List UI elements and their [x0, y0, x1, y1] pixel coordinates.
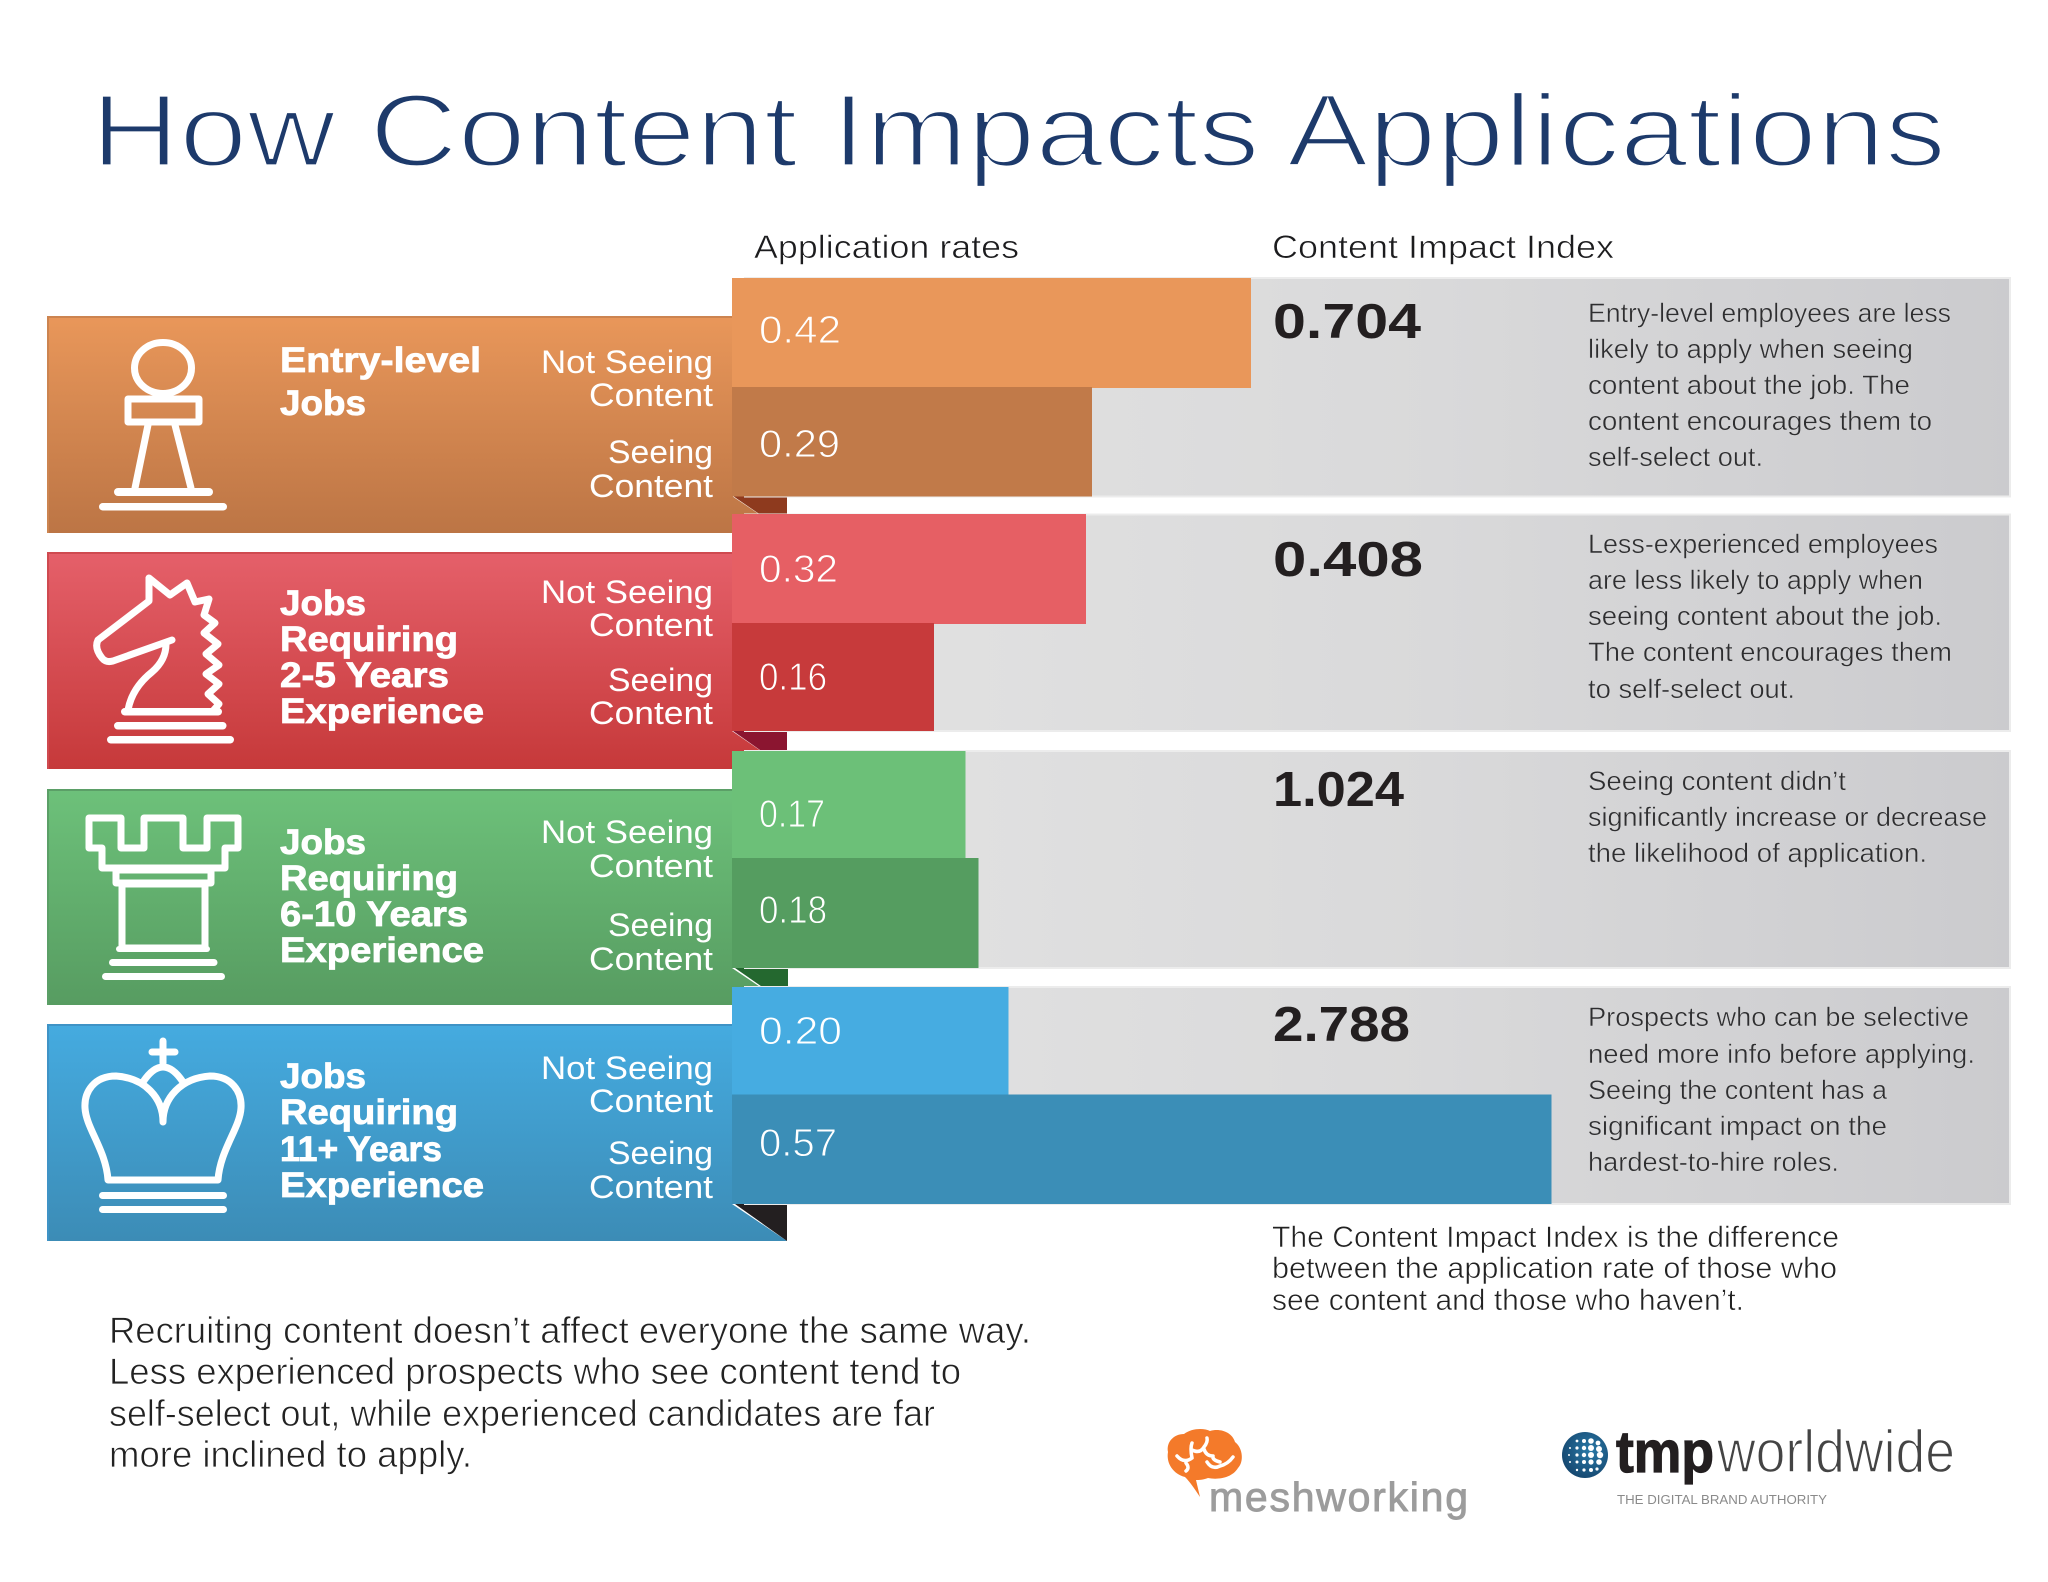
description: self-select out. [1588, 442, 1763, 472]
description [1588, 1002, 1975, 1177]
label: seeing content: Seeing [608, 907, 713, 943]
heading: jobs requiring 2-5 years experience: Requiring [280, 620, 458, 659]
heading: jobs requiring 11+ years experience: Jobs [280, 1057, 366, 1096]
label: seeing content: Seeing [608, 1135, 713, 1171]
description: hardest-to-hire roles. [1588, 1147, 1839, 1177]
label: not seeing content [541, 574, 713, 643]
description [1588, 766, 1987, 868]
background band [745, 514, 2010, 731]
heading: jobs requiring 2-5 years experience: Experience [280, 692, 484, 731]
label: seeing content: Seeing [608, 434, 713, 470]
label: not seeing content [541, 1050, 713, 1119]
label: seeing content: Content [589, 941, 713, 977]
description: Seeing content didn’t [1588, 766, 1846, 796]
fold shadow [733, 731, 787, 769]
footnote: index definition: The Content Impact Index is the difference [1272, 1221, 1839, 1254]
description: likely to apply when seeing [1588, 334, 1913, 364]
heading: jobs requiring 2-5 years experience [280, 584, 484, 731]
fold shadow [735, 968, 788, 1005]
heading: jobs requiring 2-5 years experience: Jobs [280, 584, 366, 623]
heading: jobs requiring 6-10 years experience: Jobs [280, 823, 366, 862]
value 0.57: 0.57 [759, 1122, 837, 1165]
heading: jobs requiring 11+ years experience [280, 1057, 484, 1205]
panel: 2-5 years [48, 552, 787, 769]
label: seeing content: Content [589, 1169, 713, 1205]
label: not seeing content: Not Seeing [541, 574, 713, 610]
label: seeing content [589, 1135, 713, 1205]
value 0.18: 0.18 [759, 889, 827, 932]
description: to self-select out. [1588, 674, 1795, 704]
icon: king [85, 1041, 241, 1213]
icon: knight [97, 578, 234, 744]
bar: seeing 0.29 [732, 387, 1092, 496]
value 0.17: 0.17 [759, 793, 825, 836]
fold shadow [735, 1204, 787, 1241]
description: significant impact on the [1588, 1111, 1887, 1141]
background band [745, 987, 2010, 1204]
summary paragraph: Recruiting content doesn’t affect everyone the same way. [109, 1310, 1031, 1351]
label: not seeing content: Not Seeing [541, 1050, 713, 1086]
footnote: index definition: see content and those who haven’t. [1272, 1284, 1744, 1317]
heading: jobs requiring 6-10 years experience: 6-10 Years [280, 895, 468, 934]
panel: 11+ years [48, 1024, 787, 1241]
bar: seeing 0.57 [732, 1094, 1552, 1204]
heading: entry-level jobs [280, 341, 481, 423]
index 1.024: 1.024 [1273, 763, 1404, 817]
description: need more info before applying. [1588, 1039, 1975, 1069]
row: jobs requiring 6-10 years [48, 751, 2010, 1005]
description: Seeing the content has a [1588, 1075, 1888, 1105]
label: seeing content: Content [589, 695, 713, 731]
description: Entry-level employees are less [1588, 298, 1951, 328]
value 0.29: 0.29 [759, 423, 840, 466]
panel: 6-10 years [48, 789, 787, 1005]
logo: meshworking [1168, 1429, 1468, 1520]
description: Less-experienced employees [1588, 529, 1938, 559]
bar: seeing 0.16 [732, 623, 934, 731]
wordmark: meshworking: meshworking [1209, 1474, 1468, 1520]
row: jobs requiring 2-5 years [48, 514, 2010, 769]
fold shadow [733, 496, 787, 533]
icon: orange brain [1168, 1429, 1242, 1497]
heading: jobs requiring 2-5 years experience: 2-5 Years [280, 656, 449, 695]
label: not seeing content [541, 814, 713, 884]
label: seeing content [589, 434, 713, 504]
heading: jobs requiring 11+ years experience: 11+ Years [280, 1130, 442, 1169]
background band [745, 751, 2010, 968]
background band [745, 278, 2010, 496]
column heading: application rates: Application rates [754, 229, 1019, 265]
description: significantly increase or decrease [1588, 802, 1987, 832]
bar: seeing 0.18 [732, 858, 978, 968]
description: content about the job. The [1588, 370, 1910, 400]
value 0.20: 0.20 [759, 1010, 842, 1053]
description: seeing content about the job. [1588, 601, 1942, 631]
description: content encourages them to [1588, 406, 1932, 436]
bar: not seeing 0.17 [732, 751, 966, 859]
column heading: content impact index: Content Impact Index [1272, 229, 1614, 265]
summary paragraph: self-select out, while experienced candidates are far [109, 1393, 935, 1434]
heading: jobs requiring 6-10 years experience: Experience [280, 931, 484, 970]
description [1588, 298, 1951, 472]
label: seeing content [589, 907, 713, 977]
icon: pawn [99, 342, 227, 510]
index 2.788: 2.788 [1273, 998, 1410, 1052]
wordmark: tmp: tmp [1616, 1420, 1714, 1485]
heading: jobs requiring 6-10 years experience [280, 823, 484, 970]
index 0.408: 0.408 [1273, 533, 1423, 587]
bar: not seeing 0.42 [732, 278, 1251, 388]
heading: entry-level jobs: Jobs [280, 384, 366, 423]
row: entry-level jobs [48, 278, 2010, 533]
label: not seeing content [541, 344, 713, 413]
label: not seeing content: Content [589, 377, 713, 413]
summary paragraph: Less experienced prospects who see content tend to [109, 1351, 961, 1392]
description: are less likely to apply when [1588, 565, 1923, 595]
bar: not seeing 0.20 [732, 987, 1008, 1095]
label: seeing content: Content [589, 468, 713, 504]
value 0.42: 0.42 [759, 309, 841, 352]
wordmark: worldwide: worldwide [1716, 1418, 1955, 1485]
footnote: index definition: between the application rate of those who [1272, 1252, 1837, 1285]
summary paragraph: more inclined to apply. [109, 1434, 472, 1475]
label: not seeing content: Content [589, 1083, 713, 1119]
description: The content encourages them [1588, 637, 1952, 667]
footnote: index definition [1272, 1221, 1839, 1317]
value 0.16: 0.16 [759, 656, 827, 699]
heading: jobs requiring 11+ years experience: Experience [280, 1166, 484, 1205]
tagline: THE DIGITAL BRAND AUTHORITY [1617, 1492, 1827, 1507]
description [1588, 529, 1952, 704]
label: seeing content: Seeing [608, 662, 713, 698]
label: seeing content [589, 662, 713, 731]
label: not seeing content: Content [589, 607, 713, 643]
value 0.32: 0.32 [759, 548, 838, 591]
index 0.704: 0.704 [1273, 295, 1421, 349]
label: not seeing content: Not Seeing [541, 344, 713, 380]
label: not seeing content: Not Seeing [541, 814, 713, 850]
bar: not seeing 0.32 [732, 514, 1086, 624]
panel: entry-level [48, 316, 787, 533]
summary paragraph [109, 1310, 1031, 1475]
icon: rook [89, 818, 238, 980]
icon: dotted globe [1562, 1432, 1608, 1478]
title: How Content Impacts Applications [91, 73, 1946, 188]
description: Prospects who can be selective [1588, 1002, 1969, 1032]
label: not seeing content: Content [589, 848, 713, 884]
heading: jobs requiring 11+ years experience: Requiring [280, 1093, 458, 1132]
description: the likelihood of application. [1588, 838, 1927, 868]
heading: jobs requiring 6-10 years experience: Requiring [280, 859, 458, 898]
logo: tmpworldwide [1562, 1418, 1955, 1507]
row: jobs requiring 11+ years [48, 987, 2010, 1241]
heading: entry-level jobs: Entry-level [280, 341, 481, 380]
